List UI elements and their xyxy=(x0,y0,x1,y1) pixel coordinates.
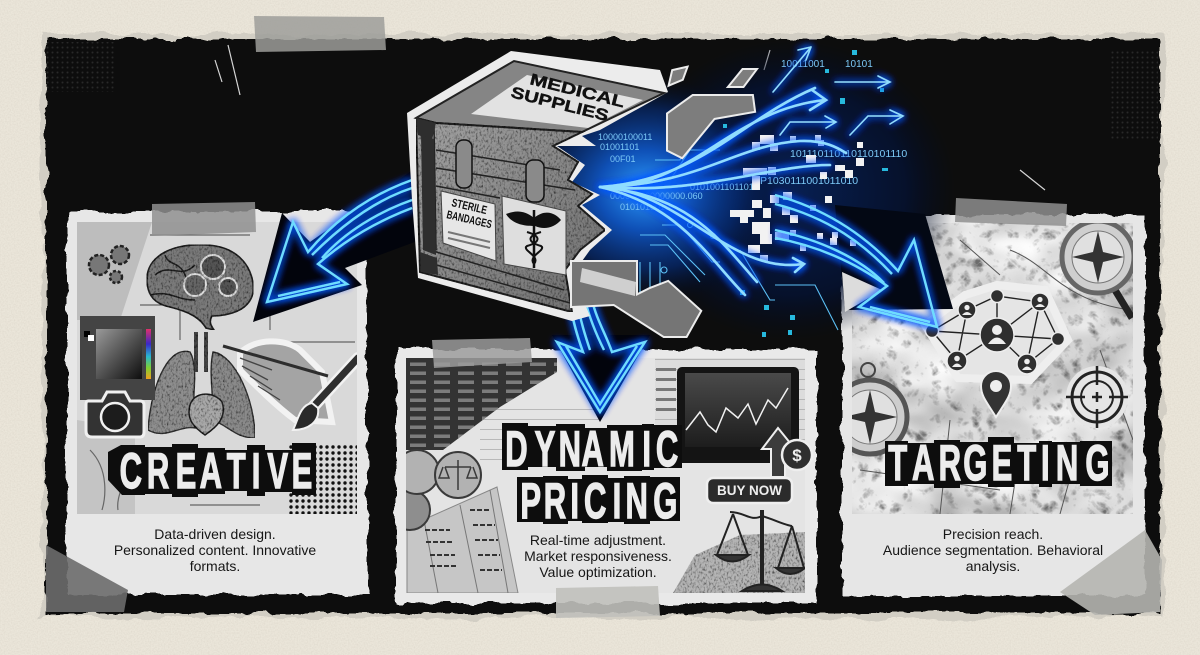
pricing title: DYNAMIC xyxy=(505,420,678,477)
creative description: formats. xyxy=(190,558,240,574)
pricing illustration area xyxy=(390,358,805,593)
tape: pricing bottom xyxy=(556,586,660,618)
binary digits: 01010011011010 xyxy=(690,182,759,192)
binary digits: 0101010010 xyxy=(620,202,670,212)
panel: dynamic pricing xyxy=(390,338,817,618)
right arrow neon outline xyxy=(775,195,937,327)
left arrow neon outline xyxy=(267,180,412,302)
icon: target crosshair xyxy=(1066,366,1128,428)
handwritten ledger xyxy=(407,487,518,593)
icon: colour picker window xyxy=(80,316,155,400)
targeting description xyxy=(883,526,1103,574)
map scrap xyxy=(673,532,805,593)
binary digits: 10101110 xyxy=(862,148,907,160)
icon: dollar badge: $ xyxy=(792,446,802,465)
dark data table xyxy=(406,358,557,450)
tape: top xyxy=(254,16,386,52)
tape: creative bottom corner xyxy=(46,545,128,612)
lid top face xyxy=(416,61,664,132)
crate corner metal xyxy=(416,118,438,275)
illustration: lungs and heart xyxy=(148,332,255,438)
bottom crate fragment xyxy=(572,262,700,336)
creative illustration area xyxy=(77,222,358,514)
digital data stream xyxy=(557,40,953,337)
icon: magnifier compass xyxy=(1062,221,1134,318)
tape: creative top xyxy=(152,202,256,236)
tablet stock chart xyxy=(677,367,799,463)
tape: targeting top xyxy=(955,198,1067,226)
illustration: brain with gears xyxy=(147,245,253,330)
pricing title xyxy=(502,420,682,529)
buy now button xyxy=(707,478,792,503)
targeting description: analysis. xyxy=(966,558,1020,574)
creative description: Data-driven design. xyxy=(154,526,276,542)
targeting description: Precision reach. xyxy=(943,526,1043,542)
crate front face xyxy=(416,118,605,312)
tape: targeting bottom corner xyxy=(1060,530,1162,615)
latches xyxy=(456,140,544,202)
tape: pricing top xyxy=(432,338,532,368)
crate white sticker outline xyxy=(407,51,668,321)
creative description xyxy=(114,526,316,574)
down arrow black base xyxy=(552,335,650,422)
creative title: CREATIVE xyxy=(120,442,312,499)
binary digits: P1030111001011010 xyxy=(760,175,858,187)
buy now button: BUY NOW xyxy=(717,483,782,498)
arrow: to targeting xyxy=(775,195,937,327)
circuit traces xyxy=(640,130,838,330)
pricing description: Market responsiveness. xyxy=(524,548,672,564)
arrow: to creative xyxy=(253,165,420,322)
icon: balance scale xyxy=(716,510,805,591)
down arrow neon outline xyxy=(557,300,645,412)
medical supplies crate xyxy=(407,51,755,336)
icon: pocket compass xyxy=(852,362,910,456)
panel: targeting xyxy=(833,198,1162,615)
icon: paintbrush xyxy=(293,358,358,430)
binary digits: 10101 xyxy=(845,59,873,70)
binary digits xyxy=(598,59,907,212)
binary digits: 01001101 xyxy=(600,142,639,152)
shard of white paper xyxy=(842,272,882,312)
cyan data pixels xyxy=(723,50,888,337)
sterile bandages label xyxy=(441,191,496,261)
lid label: SUPPLIES xyxy=(509,84,611,125)
top metal fragments xyxy=(668,68,755,157)
pricing torn paper xyxy=(396,349,817,603)
arrow: to dynamic pricing xyxy=(552,300,650,422)
lid label xyxy=(471,71,643,128)
network of people xyxy=(925,285,1068,380)
binary digits: 10000100011 xyxy=(598,132,652,142)
targeting title: TARGETING xyxy=(888,434,1109,491)
targeting map area xyxy=(833,221,1134,514)
icon: camera xyxy=(86,392,144,437)
pricing description: Real-time adjustment. xyxy=(530,532,666,548)
lid label: MEDICAL xyxy=(528,71,627,111)
icon: up arrow xyxy=(762,428,795,477)
pricing description: Value optimization. xyxy=(539,564,657,580)
white pixel cluster xyxy=(730,135,864,261)
binary digits: 000000000000000.060 xyxy=(610,191,703,201)
panel: creative xyxy=(46,202,367,612)
pricing title: PRICING xyxy=(520,472,677,529)
neon data curves xyxy=(600,47,903,295)
creative torn paper xyxy=(67,212,367,595)
upper right ledger xyxy=(655,359,805,440)
illustration: hand with pencil xyxy=(223,341,332,422)
icon: coins xyxy=(406,450,482,531)
binary digits: 1011101101101 xyxy=(790,148,863,160)
creative description: Personalized content. Innovative xyxy=(114,542,316,558)
icon: gears xyxy=(89,246,129,283)
sterile bandages label: BANDAGES xyxy=(445,209,493,231)
icon: dollar badge xyxy=(782,440,812,470)
left arrow black base xyxy=(253,165,420,322)
stream glow xyxy=(557,50,950,330)
caduceus label xyxy=(502,196,566,275)
sterile bandages label: STERILE xyxy=(450,197,488,217)
icon: map pin xyxy=(981,371,1011,417)
binary digits: 10011001 xyxy=(781,59,825,70)
targeting torn paper xyxy=(842,215,1145,596)
binary digits: 00F01 xyxy=(610,154,636,164)
right arrow panel cut-out xyxy=(835,205,953,310)
pricing description xyxy=(524,532,672,580)
crate planks and bands xyxy=(421,124,575,303)
targeting description: Audience segmentation. Behavioral xyxy=(883,542,1103,558)
